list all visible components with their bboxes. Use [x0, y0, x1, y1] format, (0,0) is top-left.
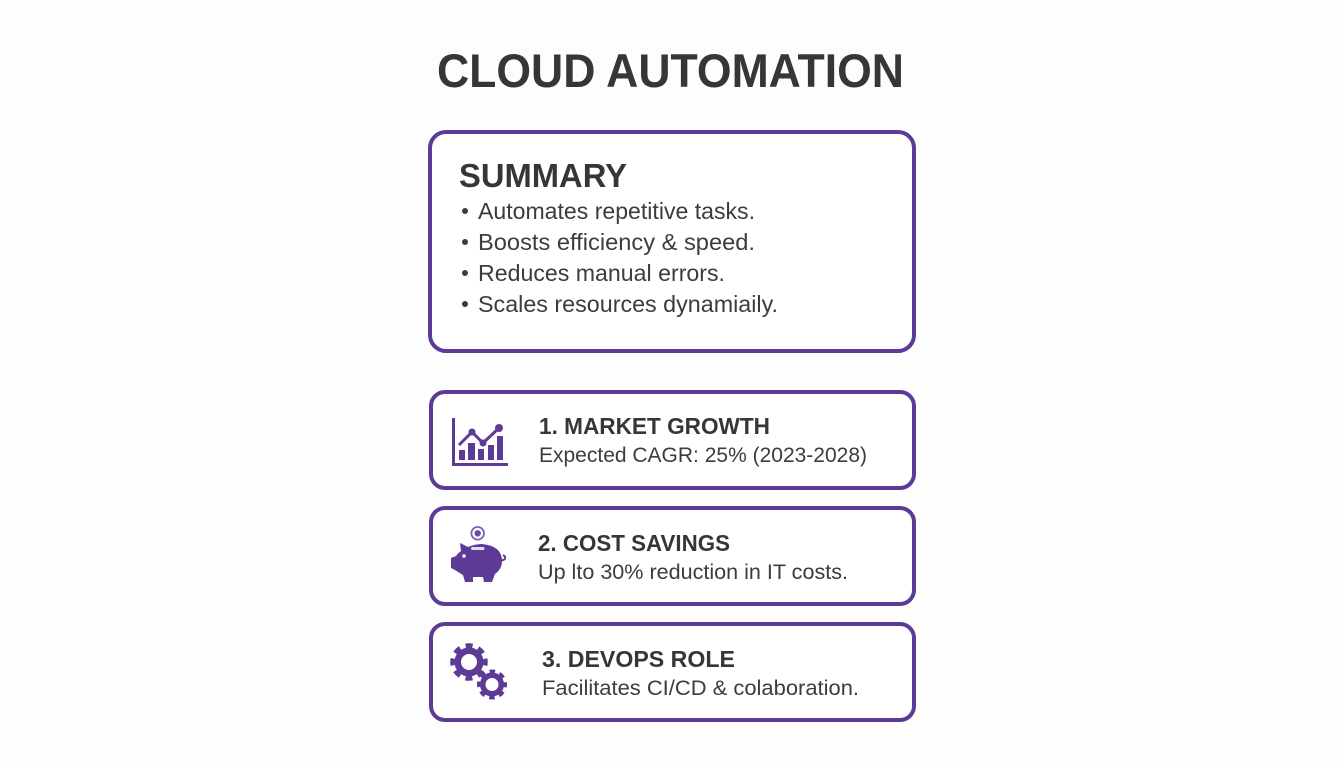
- devops role frame: [431, 624, 914, 720]
- panel: devops role: [431, 624, 914, 720]
- market growth heading: 1. MARKET GROWTH: [539, 413, 770, 439]
- title: CLOUD AUTOMATION: [437, 44, 904, 97]
- cost savings frame: [431, 508, 914, 604]
- devops role heading: 3. DEVOPS ROLE: [542, 646, 735, 672]
- summary bullet list: Automates repetitive tasks.: [478, 198, 755, 224]
- panel: cost savings: [431, 508, 914, 604]
- summary bullet list: Reduces manual errors.: [478, 260, 725, 286]
- summary panel frame: [430, 132, 914, 351]
- icon: piggy bank: [451, 527, 505, 582]
- cost savings detail: Up lto 30% reduction in IT costs.: [538, 561, 848, 584]
- cost savings heading: 2. COST SAVINGS: [538, 530, 730, 556]
- market growth frame: [431, 392, 914, 488]
- devops role detail: Facilitates CI/CD & colaboration.: [542, 677, 859, 700]
- icon: growth chart: [454, 418, 508, 464]
- summary bullet list: [462, 198, 778, 317]
- market growth detail: Expected CAGR: 25% (2023-2028): [539, 444, 867, 467]
- summary bullet list: Scales resources dynamiaily.: [478, 291, 778, 317]
- summary heading: SUMMARY: [459, 157, 627, 194]
- panel: summary: [430, 132, 914, 351]
- summary bullet list: Boosts efficiency & speed.: [478, 229, 755, 255]
- panel: market growth: [431, 392, 914, 488]
- icon: gears: [452, 646, 505, 698]
